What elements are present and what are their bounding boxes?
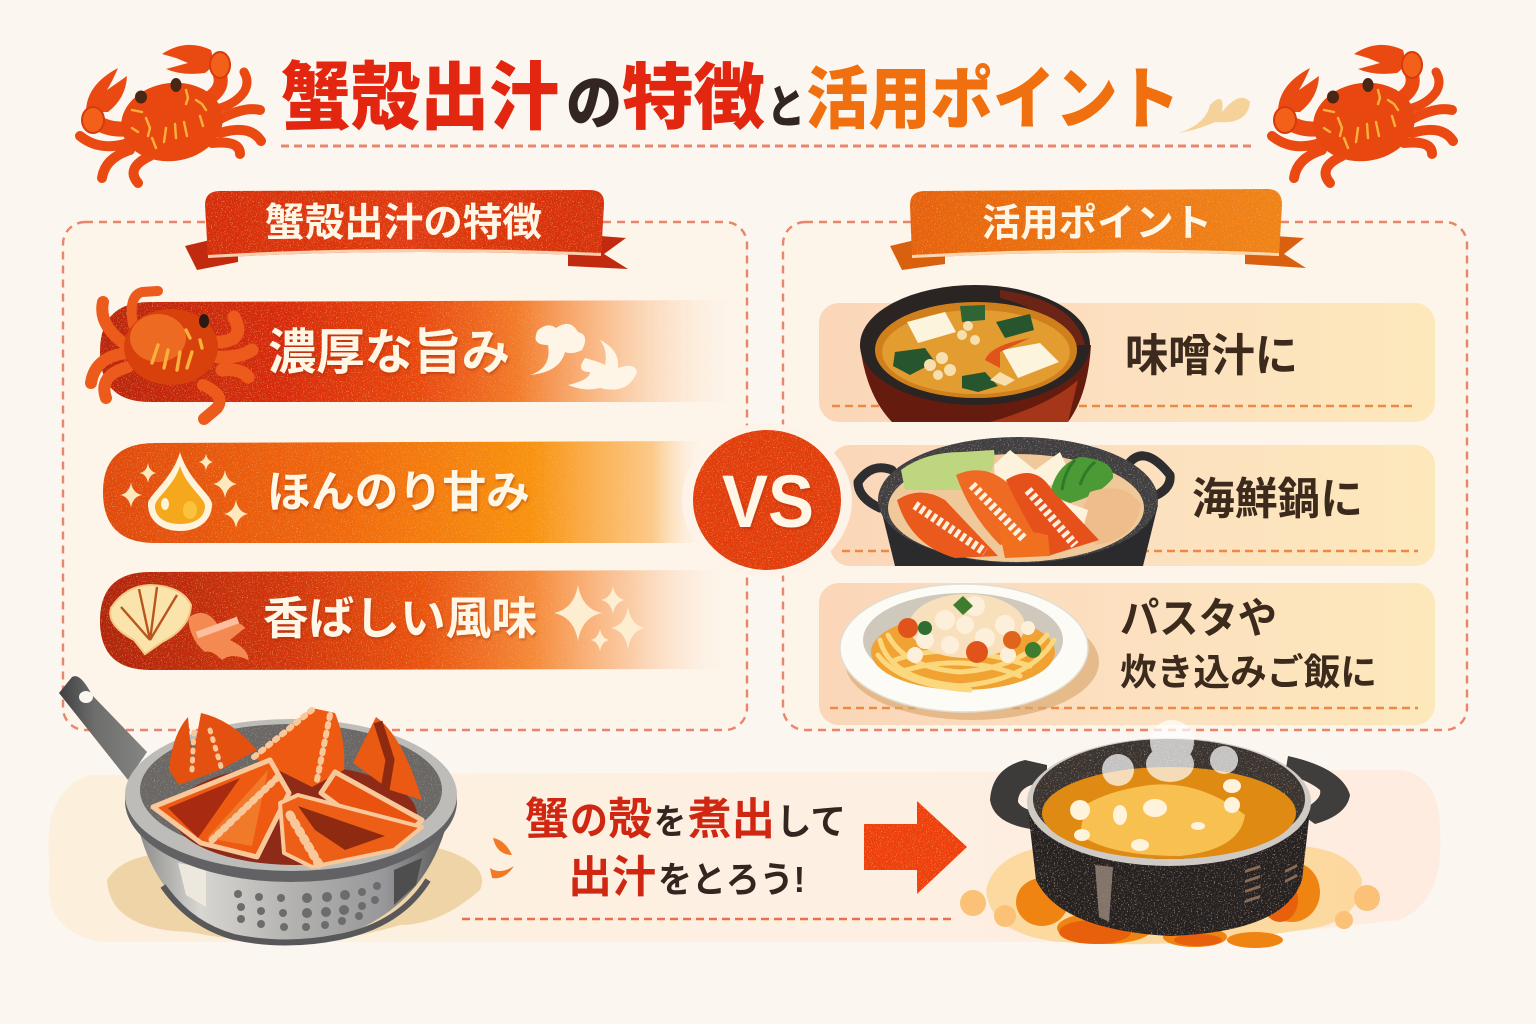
card: 海鮮鍋に: [830, 437, 1435, 566]
label: [1120, 595, 1377, 693]
bottom message: 殻: [608, 795, 652, 844]
icon: drained colander with crab shells: [59, 676, 482, 942]
VS badge: VS: [722, 460, 814, 543]
bottom message: して: [776, 801, 846, 842]
label: パスタや: [1120, 595, 1277, 642]
feature bar: 濃厚な旨み: [91, 291, 730, 419]
title: [281, 56, 1180, 139]
icon: crab right: [1272, 45, 1453, 183]
ribbon: 蟹殻出汁の特徴: [185, 190, 628, 270]
bottom message: [490, 795, 846, 902]
title: 特徴: [622, 59, 765, 139]
bottom band: [48, 770, 1440, 942]
icon: miso soup bowl: [860, 285, 1091, 422]
label: ほんのり甘み: [267, 468, 530, 517]
feature bar: 香ばしい風味: [100, 570, 720, 670]
ribbon: 活用ポイント: 活用ポイント: [982, 203, 1212, 245]
icon: seafood hot pot: [858, 437, 1170, 566]
label: 味噌汁に: [1125, 330, 1298, 381]
title: の: [566, 70, 622, 137]
title underline: [281, 144, 1255, 148]
bottom message: 出汁: [568, 853, 656, 902]
title: 蟹殻出汁: [281, 56, 559, 139]
label: 濃厚な旨み: [268, 326, 510, 380]
bottom message: を: [654, 803, 686, 842]
icon: sparkles: [120, 454, 248, 528]
bottom message: 蟹: [525, 795, 569, 844]
icon: pasta plate: [840, 584, 1099, 720]
title swirl accent: [1178, 98, 1250, 133]
bottom message: 煮出: [688, 795, 775, 844]
icon: shrimp shell: [188, 613, 248, 660]
feature bar: ほんのり甘み: [103, 441, 700, 543]
ribbon: 蟹殻出汁の特徴: 蟹殻出汁の特徴: [265, 202, 542, 245]
label: 海鮮鍋に: [1192, 475, 1363, 524]
arrow: [864, 801, 967, 894]
bottom message: をとろう!: [658, 859, 805, 900]
accent marks: [490, 838, 514, 878]
icon: crab on bar: [91, 291, 252, 419]
steam: [1102, 720, 1238, 786]
band dashed divider: [462, 918, 955, 920]
VS badge: [682, 423, 852, 577]
icon: aroma swirls: [530, 324, 637, 390]
bottom message: の: [570, 799, 608, 843]
icon: golden drop: [148, 452, 212, 531]
label: 炊き込みご飯に: [1120, 652, 1377, 693]
card: パスタや炊き込みご飯に: [819, 583, 1435, 725]
label: 香ばしい風味: [263, 593, 537, 644]
icon: crab left: [80, 45, 261, 183]
card: 味噌汁に: [819, 285, 1435, 422]
icon: seashell: [110, 585, 191, 654]
icon: simmering stock pot: [960, 720, 1380, 948]
crab shells: [153, 708, 422, 867]
ribbon: 活用ポイント: [890, 189, 1306, 270]
panel backgrounds: dashed frames: [63, 222, 1467, 730]
title: 活用ポイント: [806, 62, 1180, 138]
icon: sparkles: [554, 585, 645, 651]
title: と: [767, 81, 805, 133]
